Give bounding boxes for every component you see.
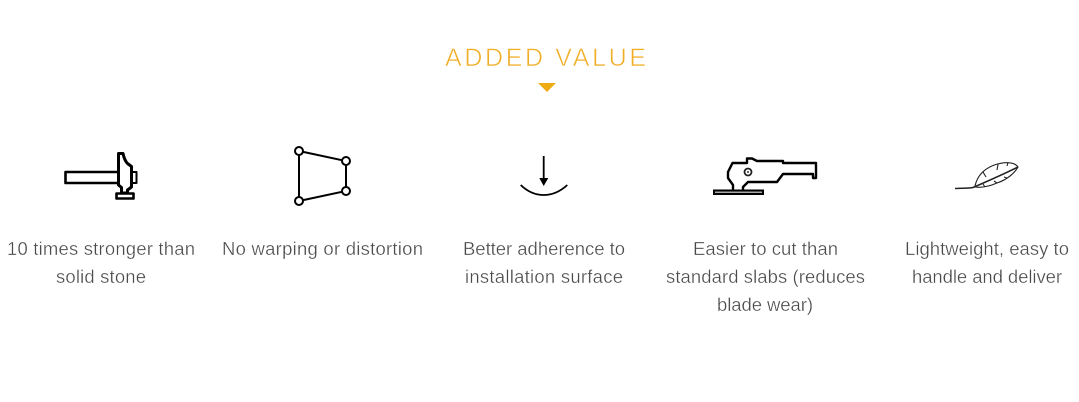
text: easier to cut <box>666 238 865 315</box>
icon: feather <box>955 162 1018 188</box>
title: ADDED VALUE <box>445 44 646 72</box>
text: easier to cut: standard slabs (reduces <box>666 266 865 287</box>
text: lightweight <box>905 238 1069 287</box>
icon: angle grinder <box>714 158 816 194</box>
icon: distorted quadrilateral <box>295 147 350 205</box>
item: stronger than stone <box>7 154 195 287</box>
text: lightweight: handle and deliver <box>912 266 1062 287</box>
icon: arrow onto curved surface <box>521 156 567 195</box>
text: better adherence <box>463 238 625 287</box>
text: no warping: No warping or distortion <box>222 238 423 259</box>
text: better adherence: installation surface <box>465 266 623 287</box>
icon: hammer <box>66 154 136 198</box>
text: lightweight: Lightweight, easy to <box>905 238 1069 259</box>
item: lightweight <box>905 162 1069 287</box>
text: better adherence: Better adherence to <box>463 238 625 259</box>
item: easier to cut <box>666 158 865 315</box>
item: better adherence <box>463 156 625 287</box>
text: easier to cut: Easier to cut than <box>693 238 838 259</box>
text: stronger than stone: 10 times stronger than <box>7 238 195 259</box>
icon: title down triangle <box>538 83 556 92</box>
text: easier to cut: blade wear) <box>717 294 813 315</box>
item: no warping <box>222 147 423 259</box>
text: stronger than stone <box>7 238 195 287</box>
text: stronger than stone: solid stone <box>56 266 146 287</box>
